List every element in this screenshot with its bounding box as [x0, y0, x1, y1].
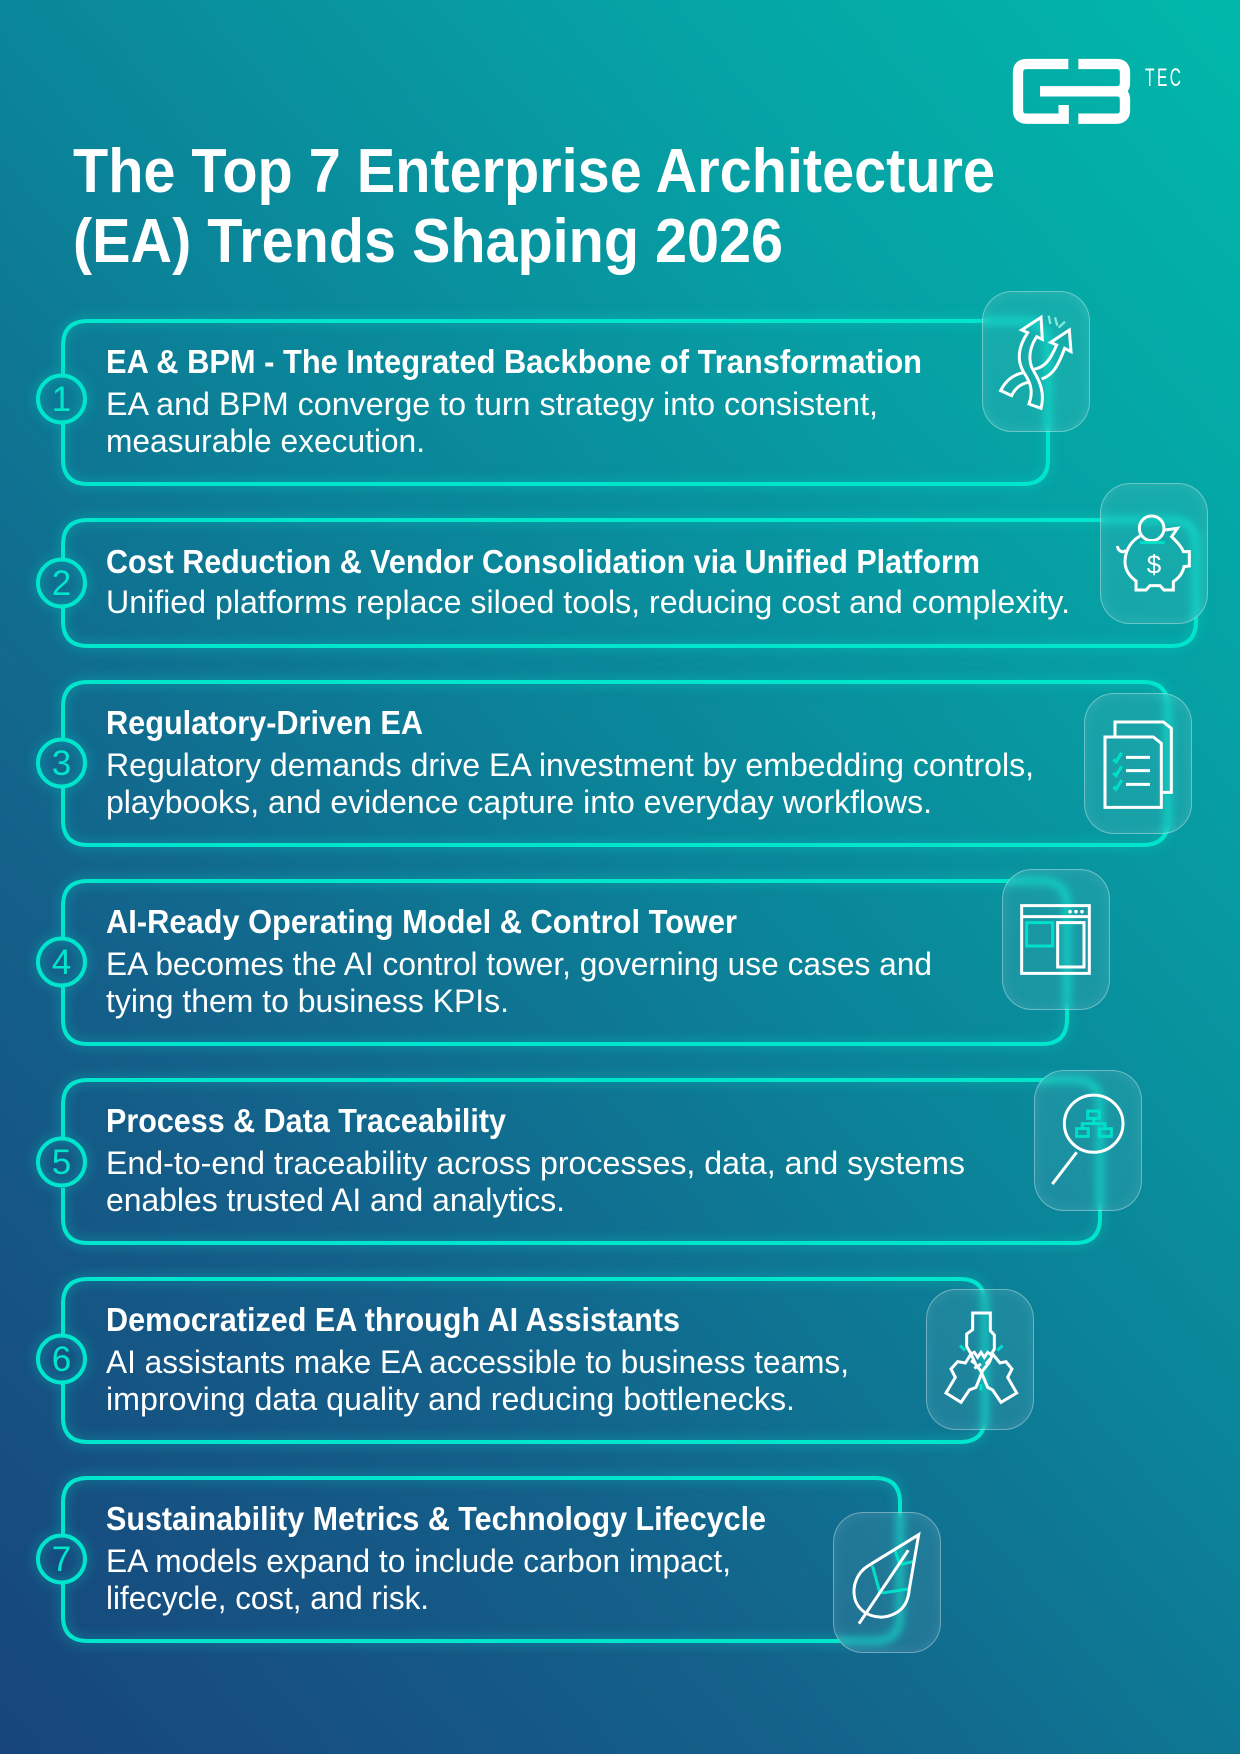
- icon: application window: [1002, 869, 1110, 1010]
- panel: trend 1: measurable execution.: [106, 423, 425, 459]
- panel: trend 2: Unified platforms replace siloed tools, reducing cost and complexity.: [106, 584, 1070, 620]
- icon: magnifier with org chart: [1034, 1070, 1142, 1211]
- panel: trend 6: 6: [52, 1340, 71, 1379]
- panel: trend 6: improving data quality and reducing bottlenecks.: [106, 1381, 795, 1417]
- panel: trend 4: [30, 869, 1110, 1052]
- panel: trend 4: 4: [52, 943, 71, 982]
- icon: leaf: [833, 1512, 941, 1653]
- icon: piggy bank: [1100, 483, 1208, 624]
- panel: trend 7: lifecycle, cost, and risk.: [106, 1580, 429, 1616]
- panel: trend 7: EA models expand to include carbon impact,: [106, 1543, 731, 1579]
- icon: documents checklist: [1084, 693, 1192, 834]
- panel: trend 6: AI assistants make EA accessible to business teams,: [106, 1344, 849, 1380]
- panel: trend 5: [30, 1070, 1142, 1251]
- panel: trend 5: End-to-end traceability across processes, data, and systems: [106, 1145, 965, 1181]
- panel: trend 6: [30, 1271, 1034, 1450]
- panel: trend 6: Democratized EA through AI Assistants: [106, 1301, 680, 1338]
- panel: trend 2: 2: [52, 564, 71, 603]
- panel: trend 3: Regulatory-Driven EA: [106, 704, 423, 741]
- panel: trend 7: 7: [52, 1540, 71, 1579]
- panel: trend 7: [30, 1470, 941, 1653]
- panel: trend 2: Cost Reduction & Vendor Consolidation via Unified Platform: [106, 543, 980, 580]
- title: The Top 7 Enterprise Architecture: [73, 137, 995, 206]
- panel: trend 3: [31, 675, 1192, 852]
- panel: trend 5: Process & Data Traceability: [106, 1102, 507, 1139]
- panel: trend 3: 3: [52, 744, 71, 783]
- panel: trend 1: EA and BPM converge to turn strategy into consistent,: [106, 386, 878, 422]
- panel: trend 1: EA & BPM - The Integrated Backbone of Transformation: [106, 343, 922, 380]
- panel: trend 1: 1: [52, 380, 71, 419]
- panel: trend 3: Regulatory demands drive EA investment by embedding controls,: [106, 747, 1034, 783]
- panel: trend 2: [32, 483, 1208, 776]
- panel: trend 1: [32, 291, 1090, 776]
- title: [73, 137, 995, 276]
- panel: trend 5: enables trusted AI and analytics.: [106, 1182, 565, 1218]
- logo: GB TEC: TEC: [1145, 64, 1183, 92]
- panel: trend 4: tying them to business KPIs.: [106, 983, 509, 1019]
- panel: trend 3: playbooks, and evidence capture into everyday workflows.: [106, 784, 932, 820]
- title: (EA) Trends Shaping 2026: [73, 207, 783, 276]
- icon: crossing arrows: [982, 291, 1090, 432]
- icon: joined hands: [926, 1289, 1034, 1430]
- panel: trend 4: EA becomes the AI control tower, governing use cases and: [106, 946, 932, 982]
- panel: trend 4: AI-Ready Operating Model & Control Tower: [106, 903, 737, 940]
- logo: GB TEC: [1012, 58, 1183, 124]
- panel: trend 7: Sustainability Metrics & Technology Lifecycle: [106, 1500, 766, 1537]
- icon: piggy bank: $: [1147, 549, 1162, 579]
- panel: trend 5: 5: [52, 1143, 71, 1182]
